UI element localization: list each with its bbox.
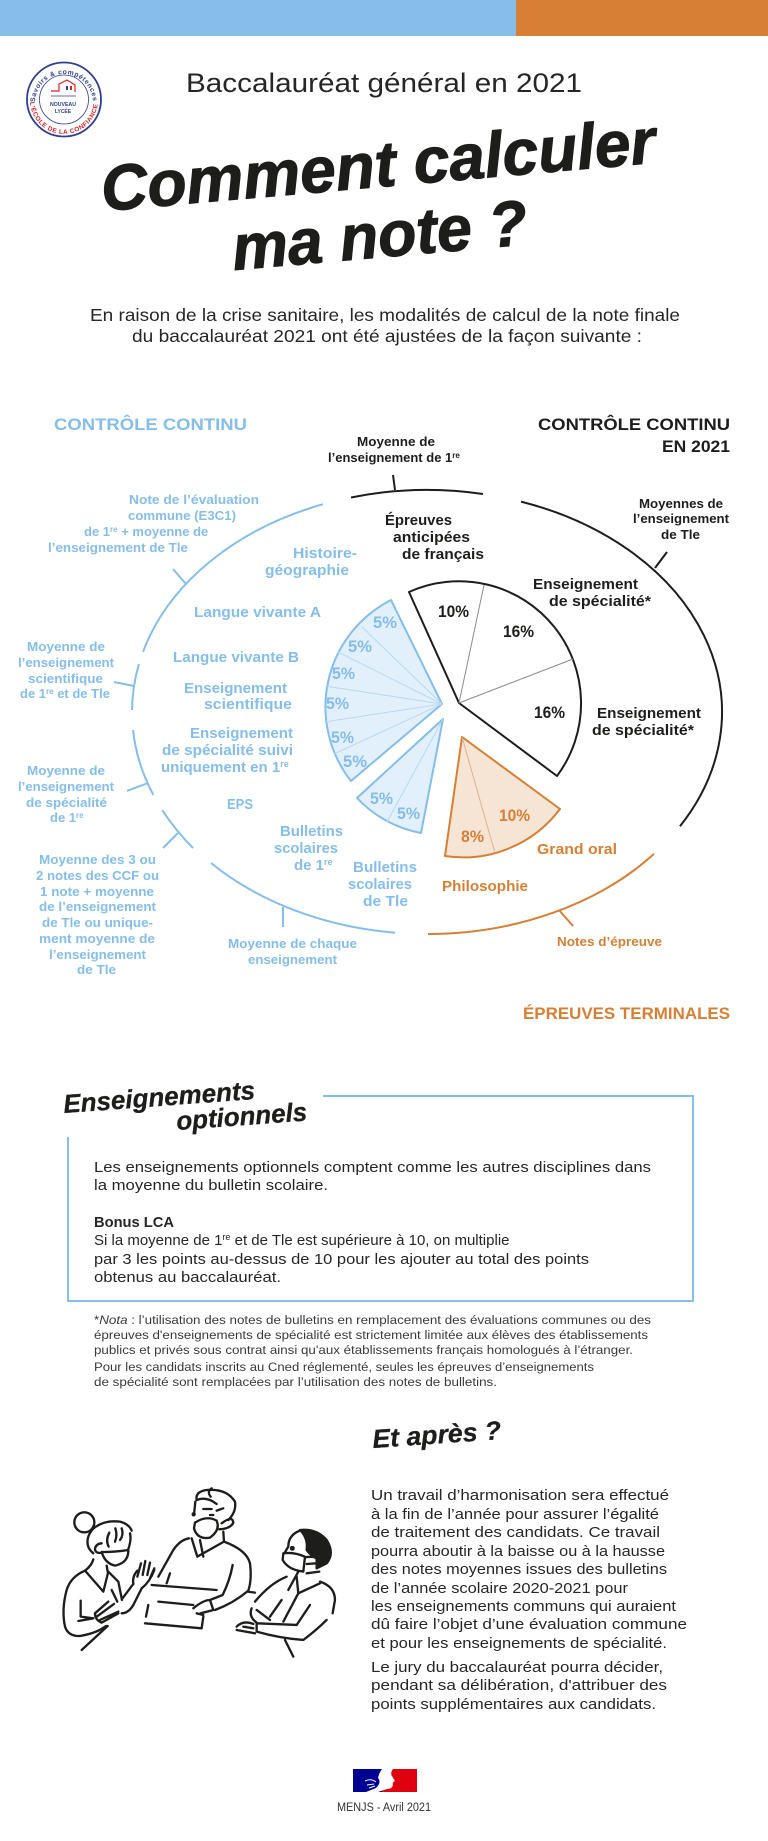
footnote: nota: *Nota : l’utilisation des notes de bulletins en remplacement des évaluations communes ou des <box>94 1313 651 1327</box>
label: note de l'évaluation commune: l’enseignement de Tle <box>48 540 188 555</box>
label: note de l'évaluation commune: Note de l’évaluation <box>129 492 259 507</box>
logo: nouveau lycée seal: NOUVEAU <box>50 102 76 108</box>
label: moyenne des CCF: ment moyenne de <box>39 931 155 946</box>
label: moyenne de chaque enseignement: Moyenne de chaque <box>228 936 357 951</box>
label: note de l'évaluation commune: + moyenne de <box>118 524 208 539</box>
intro text: En raison de la crise sanitaire, les modalités de calcul de la note finale <box>90 305 680 325</box>
panel text: Les enseignements optionnels comptent comme les autres disciplines dans <box>94 1159 651 1176</box>
text: et après body: Un travail d’harmonisation sera effectué <box>371 1487 669 1504</box>
label: moyenne de l'enseignement scientifique: Moyenne de <box>27 639 105 654</box>
label: enseignement scientifique <box>184 680 292 713</box>
heading: épreuves terminales: ÉPREUVES TERMINALES <box>523 1004 730 1023</box>
label: moyennes de l'enseignement de Tle: l’enseignement <box>633 511 730 526</box>
pie wedge: blue contrôle continu six subjects: 5% <box>373 613 397 632</box>
label: notes d'épreuve: Notes d’épreuve <box>557 934 662 949</box>
label: enseignement scientifique: scientifique <box>204 696 292 713</box>
footnote: nota <box>94 1313 651 1389</box>
label: moyenne de l'enseignement de spécialité de 1re: de 1 <box>50 810 76 825</box>
label: moyenne de l'enseignement scientifique: re <box>46 687 54 696</box>
text: et après body: les enseignements communs qui auraient <box>371 1598 677 1615</box>
pie wedge: black contrôle continu 2021: 16% <box>503 622 534 641</box>
outer arcs: contrôle continu en 2021 <box>351 475 722 826</box>
text: et après body: de traitement des candidats. Ce travail <box>371 1524 660 1541</box>
label: langue vivante B: Langue vivante B <box>173 649 299 666</box>
pie wedge: blue bulletins <box>357 719 443 833</box>
heading: et après: Et après ? <box>371 1415 502 1454</box>
text: et après body: points supplémentaires aux candidats. <box>371 1696 656 1713</box>
label: épreuves anticipées de français: anticipées <box>393 529 470 546</box>
label: histoire-géographie <box>265 545 357 579</box>
label: enseignement de spécialité lower: Enseignement <box>597 705 701 722</box>
label: moyenne des CCF: de Tle ou unique- <box>42 915 153 930</box>
label: enseignement de spécialité upper <box>533 576 651 610</box>
panel heading: Enseignements <box>62 1075 256 1119</box>
label: philosophie: Philosophie <box>442 878 528 895</box>
text: et après body <box>371 1487 687 1713</box>
label: enseignement de spécialité suivi uniquement en 1re: de spécialité suivi <box>162 742 293 759</box>
panel text: obtenus au baccalauréat. <box>94 1269 281 1286</box>
label: moyenne de l'enseignement de 1re: l’enseignement de 1 <box>328 450 460 465</box>
label: moyenne des CCF: de Tle <box>77 962 116 977</box>
text: et après body: pourra aboutir à la baisse ou à la hausse <box>371 1543 665 1560</box>
logo: nouveau lycée seal: L'ÉCOLE DE LA CONFIANCE <box>30 102 98 134</box>
pie wedge: blue contrôle continu six subjects: 5% <box>343 752 367 771</box>
label: bulletins scolaires de Tle: de Tle <box>363 893 408 910</box>
label: grand oral: Grand oral <box>537 841 617 858</box>
label: moyennes de l'enseignement de Tle <box>633 496 730 542</box>
icon: man in centre <box>145 1488 255 1628</box>
intro text <box>90 305 680 346</box>
logo: république française flag <box>353 1769 417 1792</box>
outer arcs: contrôle continu <box>114 504 395 933</box>
label: moyenne des CCF: 1 note + moyenne <box>40 884 154 899</box>
label: épreuves anticipées de français: de français <box>402 546 484 563</box>
label: histoire-géographie: Histoire- <box>293 545 357 562</box>
label: moyenne de chaque enseignement: enseignement <box>248 952 338 967</box>
subtitle: Baccalauréat général en 2021 <box>186 68 582 98</box>
label: moyenne de l'enseignement scientifique: de 1 <box>20 686 46 701</box>
label: enseignement de spécialité suivi uniquement en 1re <box>161 725 293 776</box>
panel text: re <box>222 1232 230 1242</box>
pie wedge: black contrôle continu 2021: 10% <box>438 602 469 621</box>
label: note de l'évaluation commune <box>48 492 259 555</box>
label: moyenne de l'enseignement de spécialité de 1re: re <box>76 811 84 820</box>
text: et après body: de l’année scolaire 2020-2021 pour <box>371 1580 628 1597</box>
panel: enseignements optionnels <box>62 1075 693 1301</box>
label: langue vivante A: Langue vivante A <box>194 604 321 621</box>
panel text: la moyenne du bulletin scolaire. <box>94 1177 328 1194</box>
label: moyenne des CCF: de l’enseignement <box>39 899 157 914</box>
pie wedge: blue bulletins: 5% <box>397 804 420 823</box>
label: enseignement de spécialité lower <box>592 705 701 739</box>
panel text: par 3 les points au-dessus de 10 pour les ajouter au total des points <box>94 1251 589 1268</box>
pie wedge: black contrôle continu 2021: 16% <box>534 703 565 722</box>
footnote: nota: Pour les candidats inscrits au Cned réglementé, seules les épreuves d’enseignements <box>94 1360 594 1374</box>
label: note de l'évaluation commune: re <box>110 525 118 534</box>
heading: contrôle continu: CONTRÔLE CONTINU <box>54 415 247 434</box>
icon: man on the right <box>237 1530 335 1657</box>
heading: contrôle continu en 2021 <box>538 415 730 456</box>
heading: contrôle continu en 2021: EN 2021 <box>662 437 730 456</box>
label: bulletins scolaires de 1re: de 1 <box>294 857 324 874</box>
label: enseignement de spécialité suivi uniquement en 1re: Enseignement <box>190 725 293 742</box>
label: moyenne de l'enseignement scientifique: l’enseignement <box>18 655 115 670</box>
label: moyenne des CCF: Moyenne des 3 ou <box>39 852 156 867</box>
label: moyenne de l'enseignement de 1re: Moyenne de <box>357 434 435 449</box>
main title: Comment calculer <box>98 104 661 225</box>
heading: contrôle continu en 2021: CONTRÔLE CONTINU <box>538 415 730 434</box>
pie wedge: orange épreuves terminales: 10% <box>499 806 530 825</box>
footnote: nota: épreuves d'enseignements de spécialité est strictement limitée aux élèves des établissements <box>94 1328 648 1342</box>
label: bulletins scolaires de 1re <box>274 823 343 874</box>
label: bulletins scolaires de 1re: scolaires <box>274 840 338 857</box>
label: moyenne de l'enseignement de spécialité de 1re: l’enseignement <box>18 779 115 794</box>
pie wedge: orange épreuves terminales <box>445 737 560 857</box>
pie wedge: blue contrôle continu six subjects: 5% <box>331 728 354 747</box>
credit: MENJS - Avril 2021 <box>337 1802 431 1814</box>
pie wedge: blue contrôle continu six subjects: 5% <box>326 694 349 713</box>
label: enseignement de spécialité upper: Enseignement <box>533 576 638 593</box>
label: note de l'évaluation commune: de 1 <box>84 524 110 539</box>
icon: woman <box>64 1512 154 1650</box>
main title: ma note ? <box>229 186 530 284</box>
label: enseignement de spécialité suivi uniquement en 1re: re <box>280 759 289 769</box>
main title <box>98 104 661 284</box>
label: moyenne des CCF: 2 notes des CCF ou <box>36 868 159 883</box>
label: bulletins scolaires de 1re: re <box>324 857 333 867</box>
label: moyenne de l'enseignement scientifique: scientifique <box>28 671 103 686</box>
label: moyenne de l'enseignement de spécialité de 1re <box>18 763 115 825</box>
label: enseignement de spécialité lower: de spécialité* <box>592 722 694 739</box>
text: et après body: pendant sa délibération, d'attribuer des <box>371 1677 667 1694</box>
label: EPS: EPS <box>227 796 253 813</box>
label: moyenne de l'enseignement scientifique: et de Tle <box>54 686 110 701</box>
logo: nouveau lycée seal: Savoirs & compétences <box>30 70 96 102</box>
pie wedge: black contrôle continu 2021 <box>409 581 581 776</box>
label: moyenne de l'enseignement de spécialité de 1re: Moyenne de <box>27 763 105 778</box>
pie wedge: blue bulletins: 5% <box>370 789 393 808</box>
label: moyenne de l'enseignement de spécialité de 1re: de spécialité <box>26 795 107 810</box>
text: et après body: et pour les enseignements de spécialité. <box>371 1635 667 1652</box>
label: épreuves anticipées de français: Épreuves <box>385 512 452 529</box>
label: bulletins scolaires de 1re: Bulletins <box>280 823 343 840</box>
label: moyennes de l'enseignement de Tle: de Tle <box>661 527 700 542</box>
label: bulletins scolaires de Tle: scolaires <box>348 876 412 893</box>
label: moyenne des CCF <box>36 852 159 977</box>
label: enseignement de spécialité upper: de spécialité* <box>549 593 651 610</box>
panel text: Si la moyenne de 1 <box>94 1232 222 1249</box>
pie wedge: blue contrôle continu six subjects <box>324 600 442 781</box>
panel text: Bonus LCA <box>94 1214 174 1231</box>
footnote: nota: publics et privés sous contrat ainsi qu'aux établissements français homologués à l’étranger. <box>94 1343 633 1357</box>
pie wedge: blue contrôle continu six subjects: 5% <box>332 664 355 683</box>
panel heading <box>62 1075 308 1136</box>
label: bulletins scolaires de Tle <box>348 859 417 910</box>
label: moyenne des CCF: l’enseignement <box>49 947 147 962</box>
logo: nouveau lycée seal <box>26 62 102 138</box>
label: enseignement de spécialité suivi uniquement en 1re: uniquement en 1 <box>161 759 280 776</box>
text: et après body: à la fin de l’année pour assurer l’égalité <box>371 1506 659 1523</box>
label: épreuves anticipées de français <box>385 512 484 563</box>
intro text: du baccalauréat 2021 ont été ajustées de la façon suivante : <box>132 326 642 346</box>
illustration: three masked people around a table <box>64 1488 335 1657</box>
label: moyenne de l'enseignement de 1re: re <box>452 451 460 460</box>
footnote: nota: de spécialité sont remplacées par l’utilisation des notes de bulletins. <box>94 1375 497 1389</box>
panel text <box>94 1159 651 1286</box>
panel heading: optionnels <box>175 1096 308 1136</box>
label: bulletins scolaires de Tle: Bulletins <box>353 859 417 876</box>
pie wedge: blue contrôle continu six subjects: 5% <box>348 637 372 656</box>
top colour band <box>0 0 768 36</box>
label: moyennes de l'enseignement de Tle: Moyennes de <box>639 496 723 511</box>
panel text: et de Tle est supérieure à 10, on multiplie <box>230 1232 510 1249</box>
label: histoire-géographie: géographie <box>265 562 349 579</box>
label: enseignement scientifique: Enseignement <box>184 680 287 697</box>
label: moyenne de chaque enseignement <box>228 936 357 967</box>
logo: nouveau lycée seal: LYCÉE <box>55 107 72 115</box>
label: note de l'évaluation commune: commune (E3C1) <box>128 508 236 523</box>
pie wedge: orange épreuves terminales: 8% <box>461 827 484 846</box>
text: et après body: Le jury du baccalauréat pourra décider, <box>371 1659 663 1676</box>
text: et après body: des notes moyennes issues des bulletins <box>371 1561 667 1578</box>
outer arc: épreuves terminales <box>428 854 654 934</box>
panel border <box>68 1096 693 1301</box>
text: et après body: dû faire l’objet d’une évaluation commune <box>371 1616 687 1633</box>
label: moyenne de l'enseignement scientifique <box>18 639 115 701</box>
